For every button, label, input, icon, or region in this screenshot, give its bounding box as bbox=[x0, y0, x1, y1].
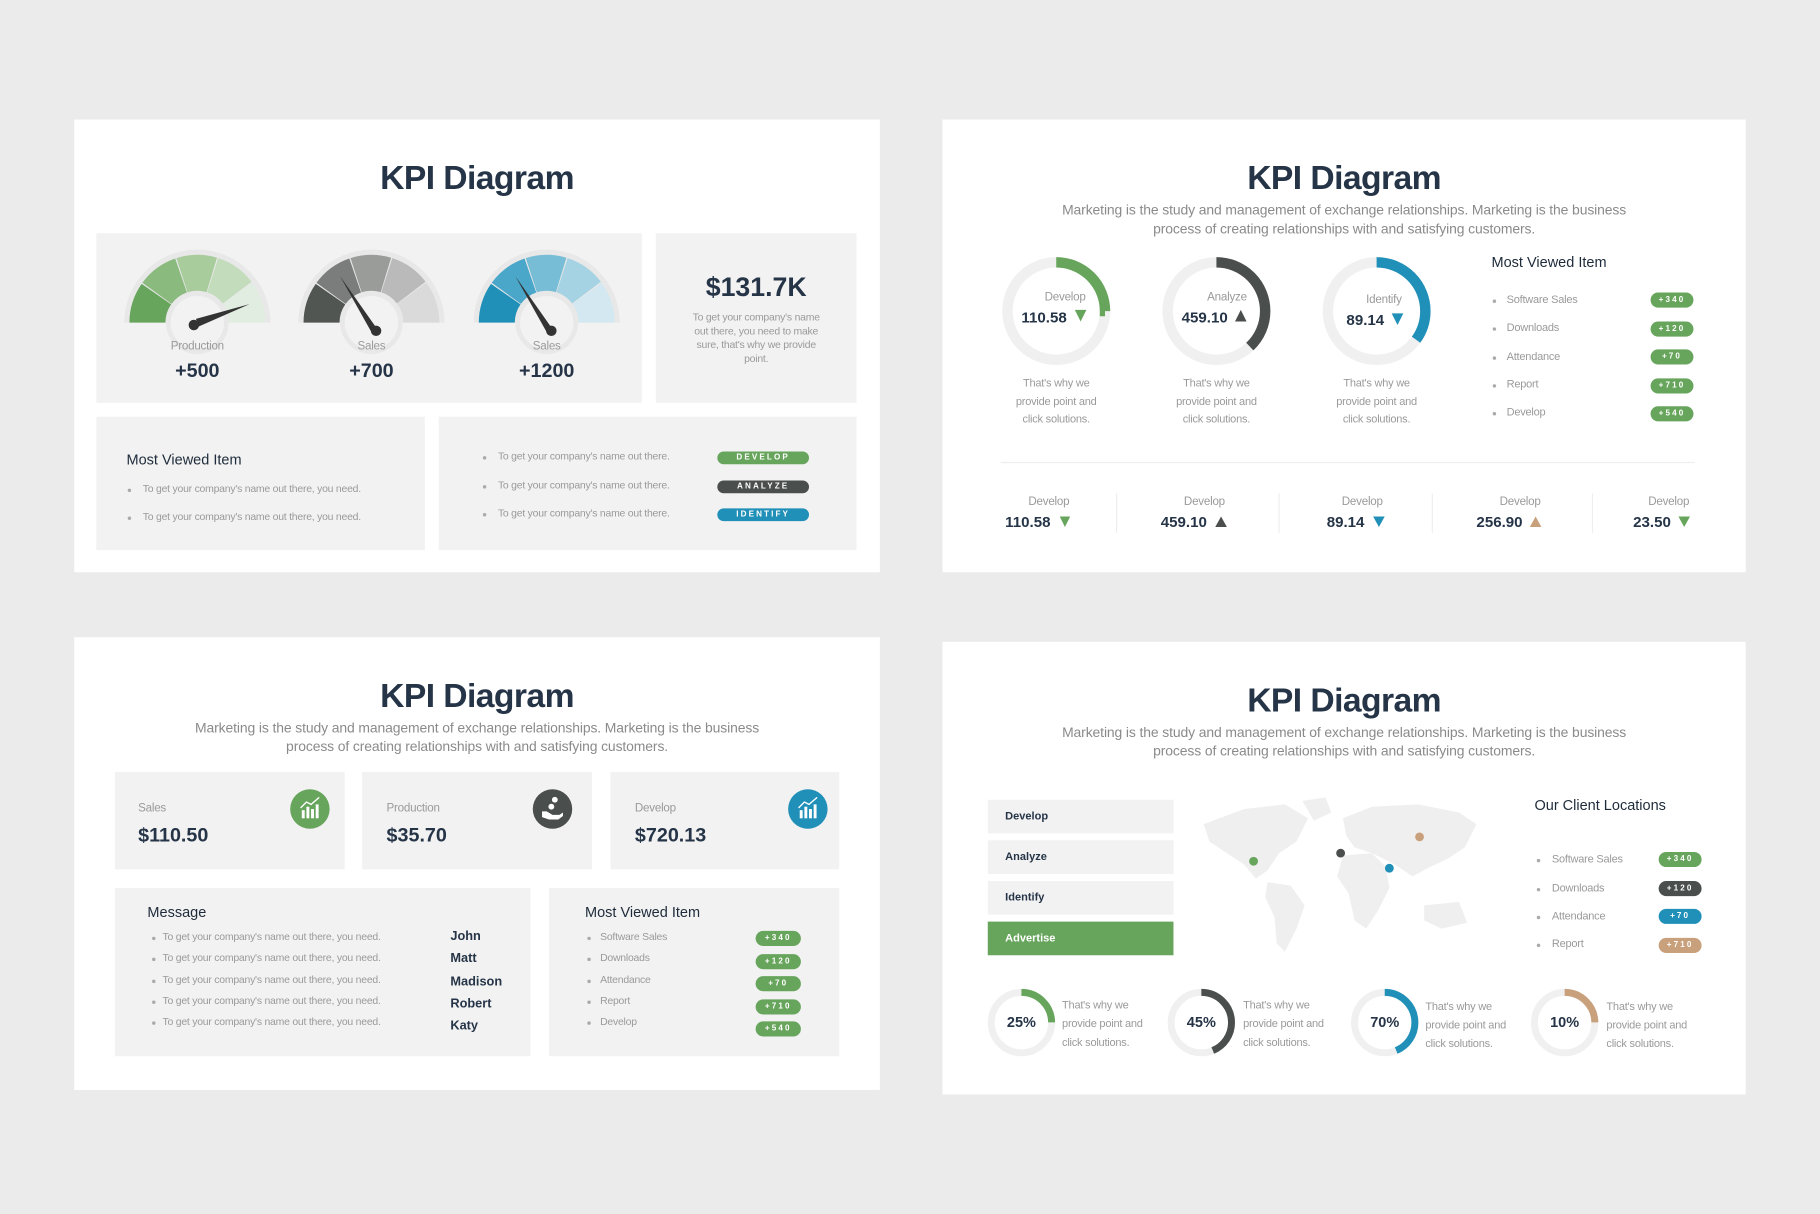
message box: Madison bbox=[450, 975, 502, 989]
message box: Katy bbox=[450, 1019, 478, 1033]
panel: donut KPI: Downloads bbox=[1507, 322, 1559, 334]
panel: donut KPI: 23.50 bbox=[1633, 513, 1671, 530]
panel: donut KPI: +340 bbox=[1659, 296, 1685, 304]
tags box: To get your company's name out there. bbox=[498, 450, 670, 462]
panel: map KPI: provide point and bbox=[1606, 1019, 1687, 1032]
panel: map KPI: click solutions. bbox=[1062, 1037, 1129, 1049]
most viewed box bbox=[96, 417, 425, 550]
panel: donut KPI: 256.90 bbox=[1476, 513, 1523, 530]
panel: donut KPI: 89.14 bbox=[1327, 513, 1364, 530]
panel: donut KPI: Develop bbox=[1500, 496, 1541, 508]
most viewed box: Software Sales bbox=[600, 931, 667, 942]
panel: donut KPI: 110.58 bbox=[1005, 513, 1050, 530]
icon: chart green bbox=[290, 789, 330, 829]
card: production: $35.70 bbox=[387, 824, 447, 846]
gauge box bbox=[96, 233, 642, 403]
panel: donut KPI: Report bbox=[1507, 378, 1538, 391]
panel: map KPI: Software Sales bbox=[1552, 853, 1623, 866]
panel: donut KPI: click solutions. bbox=[1183, 413, 1250, 426]
gauge box: +500 bbox=[175, 360, 220, 382]
stat box bbox=[656, 233, 857, 403]
panel: donut KPI: Identify bbox=[1366, 294, 1402, 306]
card: sales: $110.50 bbox=[138, 824, 208, 846]
panel: map KPI: +70 bbox=[1670, 912, 1690, 920]
message box: To get your company's name out there, you need. bbox=[162, 1016, 381, 1027]
donuts bbox=[1002, 257, 1431, 365]
card: production bbox=[362, 772, 592, 869]
subtitle: process of creating relationships with and satisfying customers. bbox=[286, 738, 668, 754]
most viewed box: Report bbox=[600, 995, 630, 1006]
card: sales bbox=[115, 772, 345, 869]
panel: donut KPI: click solutions. bbox=[1343, 413, 1410, 426]
panel: donut KPI: provide point and bbox=[1176, 395, 1257, 408]
stat box: $131.7K bbox=[706, 272, 807, 302]
title: KPI Diagram bbox=[380, 160, 574, 197]
card: sales: Sales bbox=[138, 802, 166, 815]
message box: To get your company's name out there, you need. bbox=[162, 995, 381, 1006]
message box: To get your company's name out there, you need. bbox=[162, 974, 381, 985]
most viewed box: Attendance bbox=[600, 974, 651, 985]
panel: donut KPI: 110.58 bbox=[1021, 309, 1067, 326]
panel: donut KPI: Develop bbox=[1648, 496, 1689, 508]
subtitle: Marketing is the study and management of exchange relationships. Marketing is the business bbox=[1062, 202, 1626, 218]
panel: donut KPI: Develop bbox=[1045, 291, 1086, 304]
panel: donut KPI: Develop bbox=[1028, 496, 1069, 508]
panel: map KPI: provide point and bbox=[1243, 1018, 1324, 1031]
title: KPI Diagram bbox=[1247, 160, 1441, 197]
message box: John bbox=[450, 930, 481, 944]
panel: map KPI: 25% bbox=[1007, 1014, 1036, 1031]
icon: hand coins bbox=[532, 789, 572, 829]
panel: map KPI: That's why we bbox=[1243, 999, 1310, 1012]
subtitle: process of creating relationships with and satisfying customers. bbox=[1153, 742, 1535, 759]
panel: donut KPI: That's why we bbox=[1183, 377, 1250, 390]
subtitle bbox=[195, 720, 759, 754]
title: KPI Diagram bbox=[1247, 682, 1441, 720]
panel: map KPI: click solutions. bbox=[1243, 1037, 1310, 1049]
panel: map KPI: Attendance bbox=[1552, 910, 1605, 923]
panel: map KPI: That's why we bbox=[1606, 1001, 1673, 1013]
most viewed box bbox=[549, 888, 839, 1056]
bottom stats row bbox=[1060, 494, 1690, 533]
gauge box: +1200 bbox=[519, 360, 574, 382]
tags box: IDENTIFY bbox=[736, 511, 790, 519]
panel: map KPI: 70% bbox=[1370, 1014, 1399, 1031]
tabs bbox=[988, 800, 1173, 833]
subtitle bbox=[1062, 724, 1626, 759]
message box: To get your company's name out there, you need. bbox=[162, 952, 381, 963]
percentage donuts bbox=[988, 988, 1598, 1056]
stat box: To get your company's name out there, you need to make sure, that's why we provide point. bbox=[693, 311, 820, 364]
donut captions: That's why we bbox=[1023, 377, 1089, 390]
panel: donut KPI: Develop bbox=[1342, 496, 1383, 508]
map markers bbox=[1249, 832, 1424, 873]
icon: chart blue bbox=[788, 789, 828, 829]
most viewed box: +340 bbox=[765, 934, 792, 942]
panel: donut KPI: 459.10 bbox=[1182, 309, 1228, 326]
gauge: sales blue bbox=[474, 250, 620, 354]
subtitle: process of creating relationships with and satisfying customers. bbox=[1153, 220, 1535, 236]
panel: donut KPI: Software Sales bbox=[1507, 294, 1578, 306]
panel: map KPI: click solutions. bbox=[1606, 1038, 1674, 1050]
subtitle: Marketing is the study and management of exchange relationships. Marketing is the business bbox=[1062, 724, 1626, 741]
message box: Message bbox=[147, 904, 206, 920]
panel: donut KPI: 89.14 bbox=[1346, 311, 1384, 328]
panel: map KPI: That's why we bbox=[1062, 999, 1129, 1012]
panel: donut KPI: +710 bbox=[1659, 382, 1685, 390]
panel: map KPI: +710 bbox=[1667, 941, 1693, 949]
most viewed list: Most Viewed Item bbox=[1492, 254, 1607, 270]
most viewed box: Most Viewed Item bbox=[127, 452, 242, 468]
gauge: sales gray bbox=[298, 250, 445, 354]
gauge labels: Production bbox=[171, 340, 224, 353]
card: production: Production bbox=[387, 802, 440, 815]
tags box: To get your company's name out there. bbox=[498, 507, 670, 519]
title: KPI Diagram bbox=[380, 678, 574, 715]
panel: donut KPI: provide point and bbox=[1336, 395, 1417, 408]
panel: map KPI: 10% bbox=[1550, 1014, 1579, 1031]
panel: donut KPI: Develop bbox=[1184, 496, 1225, 508]
panel: donut KPI: +540 bbox=[1659, 410, 1685, 418]
panel: map KPI: click solutions. bbox=[1425, 1038, 1493, 1050]
card: develop: Develop bbox=[635, 802, 676, 815]
panel: map KPI: Downloads bbox=[1552, 882, 1604, 895]
most viewed box: +540 bbox=[765, 1025, 792, 1033]
gauges svg bbox=[124, 250, 620, 354]
most viewed box: +70 bbox=[768, 980, 788, 988]
panel: donut KPI: Develop bbox=[1507, 406, 1545, 419]
panel: donut KPI: +70 bbox=[1662, 353, 1682, 361]
panel: donut KPI: That's why we bbox=[1343, 377, 1410, 390]
most viewed box: To get your company's name out there, you need. bbox=[143, 511, 361, 522]
tags box bbox=[439, 417, 857, 550]
gauge box: Sales bbox=[357, 340, 385, 353]
donut captions: provide point and bbox=[1016, 395, 1097, 408]
panel: map KPI: +340 bbox=[1667, 855, 1693, 864]
tags box: ANALYZE bbox=[737, 483, 789, 491]
panel: donut KPI: Attendance bbox=[1507, 351, 1560, 363]
donut captions bbox=[1016, 377, 1097, 426]
card: develop: $720.13 bbox=[635, 824, 706, 846]
client locations: Our Client Locations bbox=[1534, 797, 1666, 814]
panel: donut KPI: +120 bbox=[1659, 325, 1685, 333]
panel: donut KPI: Analyze bbox=[1207, 291, 1247, 304]
panel: map KPI bbox=[942, 642, 1746, 1095]
tabs: Develop bbox=[1005, 810, 1048, 823]
donut captions: click solutions. bbox=[1023, 413, 1090, 426]
most viewed box: Most Viewed Item bbox=[585, 904, 700, 920]
message box bbox=[115, 888, 530, 1056]
panel: map KPI: +120 bbox=[1667, 884, 1693, 893]
panel: donut KPI: 459.10 bbox=[1161, 513, 1207, 530]
panel: map KPI: Analyze bbox=[1005, 851, 1047, 864]
tags box: DEVELOP bbox=[736, 454, 790, 462]
card: develop bbox=[611, 772, 839, 869]
panel: map KPI: Report bbox=[1552, 938, 1584, 951]
panel: map KPI: provide point and bbox=[1062, 1018, 1143, 1031]
panel: map KPI: Advertise bbox=[1005, 932, 1055, 945]
panel: map KPI: 45% bbox=[1187, 1014, 1216, 1031]
most viewed box: Develop bbox=[600, 1016, 637, 1027]
panel: map KPI: That's why we bbox=[1425, 1001, 1492, 1013]
subtitle: Marketing is the study and management of exchange relationships. Marketing is the business bbox=[195, 720, 759, 736]
panel: cards KPI bbox=[74, 637, 880, 1090]
subtitle bbox=[1062, 202, 1626, 236]
most viewed box: +120 bbox=[765, 958, 792, 966]
panel: gauges KPI bbox=[74, 120, 880, 572]
panel: map KPI: Identify bbox=[1005, 891, 1044, 904]
message box: To get your company's name out there, you need. bbox=[162, 931, 381, 942]
panel: donut KPI bbox=[942, 120, 1746, 572]
world map bbox=[1204, 798, 1476, 952]
tags box: To get your company's name out there. bbox=[498, 479, 670, 491]
gauge box: +700 bbox=[349, 360, 394, 382]
most viewed box: Downloads bbox=[600, 952, 650, 963]
message box: Robert bbox=[450, 997, 492, 1011]
gauge: production bbox=[124, 250, 270, 354]
panel: map KPI: provide point and bbox=[1425, 1019, 1506, 1032]
most viewed box: To get your company's name out there, you need. bbox=[143, 483, 361, 494]
gauge box: Sales bbox=[533, 340, 561, 353]
most viewed box: +710 bbox=[765, 1003, 792, 1011]
message box: Matt bbox=[450, 952, 477, 966]
